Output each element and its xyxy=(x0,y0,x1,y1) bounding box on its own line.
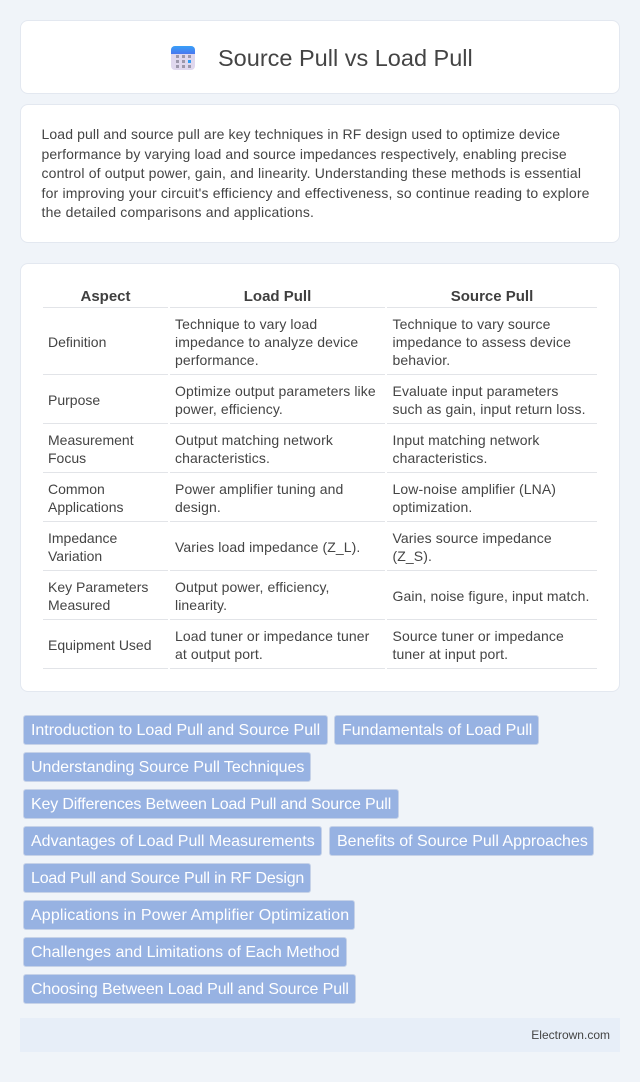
tag: advantages xyxy=(23,826,322,856)
tag: choosing xyxy=(23,974,356,1004)
row: common applications: Common xyxy=(48,481,105,497)
row: key parameters measured: Output power, efficiency, xyxy=(175,579,330,595)
row: equipment used: Source tuner or impedance xyxy=(392,628,564,644)
tag: key differences: Key Differences Between Load Pull and Source Pull xyxy=(31,796,391,813)
tag: fundamentals xyxy=(334,715,539,745)
table header: Aspect xyxy=(80,288,131,305)
row: definition: Technique to vary source xyxy=(392,316,551,332)
intro text: for improving your circuit's efficiency and effectiveness, so continue reading to explore xyxy=(42,185,590,201)
row: measurement focus: Output matching network xyxy=(175,432,333,448)
row: impedance variation: (Z_S). xyxy=(392,548,432,564)
row: key parameters measured: Measured xyxy=(48,597,110,613)
intro text: Load pull and source pull are key techniques in RF design used to optimize device xyxy=(42,126,560,142)
row: common applications: Low-noise amplifier (LNA) xyxy=(392,481,556,497)
row: purpose: power, efficiency. xyxy=(175,401,283,417)
row: key parameters measured: linearity. xyxy=(175,597,227,613)
row: measurement focus: characteristics. xyxy=(392,450,487,466)
tag: source pull techniques xyxy=(23,752,311,782)
intro text: performance by varying load and source impedances respectively, enabling precise xyxy=(42,146,567,162)
tag: challenges: Challenges and Limitations of Each Method xyxy=(31,944,340,961)
tag: rf design xyxy=(23,863,311,893)
row: common applications: optimization. xyxy=(392,499,472,515)
icon: calendar xyxy=(171,46,195,70)
tag: advantages: Advantages of Load Pull Measurements xyxy=(31,833,315,850)
row: purpose xyxy=(43,383,597,424)
row: common applications: Power amplifier tuning and xyxy=(175,481,343,497)
row: impedance variation xyxy=(43,530,597,571)
tag: introduction: Introduction to Load Pull and Source Pull xyxy=(31,722,320,739)
header panel xyxy=(20,20,620,94)
row: purpose: Optimize output parameters like xyxy=(175,383,376,399)
row: key parameters measured: Gain, noise figure, input match. xyxy=(392,588,589,604)
tag: power amplifier: Applications in Power Amplifier Optimization xyxy=(31,907,349,924)
row: common applications: design. xyxy=(175,499,221,515)
tag: benefits xyxy=(329,826,594,856)
tag: key differences xyxy=(23,789,399,819)
intro panel xyxy=(20,104,620,243)
table header: Source Pull xyxy=(451,288,533,305)
tag: challenges xyxy=(23,937,347,967)
tag list xyxy=(23,715,594,1004)
row: measurement focus: Input matching network xyxy=(392,432,539,448)
row: key parameters measured: Key Parameters xyxy=(48,579,148,595)
comparison table panel xyxy=(20,263,620,692)
table header: Load Pull xyxy=(244,288,311,305)
tag: fundamentals: Fundamentals of Load Pull xyxy=(342,722,532,739)
row: measurement focus xyxy=(43,432,597,473)
row: equipment used: Equipment Used xyxy=(48,637,152,653)
row: equipment used: tuner at input port. xyxy=(392,646,508,662)
row: definition xyxy=(43,316,597,375)
row: common applications xyxy=(43,481,597,522)
row: definition: Technique to vary load xyxy=(175,316,317,332)
intro text: control of output power, gain, and linearity. Understanding these methods is essential xyxy=(42,165,581,181)
row: impedance variation: Impedance xyxy=(48,530,117,546)
row: definition: impedance to analyze device xyxy=(175,334,358,350)
row: impedance variation: Varies load impedance (Z_L). xyxy=(175,539,360,555)
row: impedance variation: Varies source impedance xyxy=(392,530,552,546)
row: key parameters measured xyxy=(43,579,597,620)
tag: choosing: Choosing Between Load Pull and Source Pull xyxy=(31,981,349,998)
footer xyxy=(20,1018,620,1052)
row: measurement focus: Measurement xyxy=(48,432,134,448)
intro text xyxy=(42,126,590,220)
row: common applications: Applications xyxy=(48,499,124,515)
table header xyxy=(43,288,597,308)
row: definition: performance. xyxy=(175,352,259,368)
row: purpose: Purpose xyxy=(48,392,100,408)
row: impedance variation: Variation xyxy=(48,548,102,564)
row: purpose: Evaluate input parameters xyxy=(392,383,558,399)
intro text: the detailed comparisons and applications. xyxy=(42,204,314,220)
row: measurement focus: characteristics. xyxy=(175,450,270,466)
row: equipment used: at output port. xyxy=(175,646,263,662)
row: equipment used: Load tuner or impedance tuner xyxy=(175,628,369,644)
title: Source Pull vs Load Pull xyxy=(218,45,473,71)
row: purpose: such as gain, input return loss. xyxy=(392,401,586,417)
row: definition: behavior. xyxy=(392,352,450,368)
tag: benefits: Benefits of Source Pull Approaches xyxy=(337,833,588,850)
tag: power amplifier xyxy=(23,900,355,930)
row: equipment used xyxy=(43,628,597,669)
tag: rf design: Load Pull and Source Pull in RF Design xyxy=(31,870,304,887)
footer credit: Electrown.com xyxy=(531,1028,610,1042)
row: definition: Definition xyxy=(48,334,106,350)
row: definition: impedance to assess device xyxy=(392,334,571,350)
tag: source pull techniques: Understanding Source Pull Techniques xyxy=(31,759,304,776)
tag: introduction xyxy=(23,715,328,745)
row: measurement focus: Focus xyxy=(48,450,86,466)
